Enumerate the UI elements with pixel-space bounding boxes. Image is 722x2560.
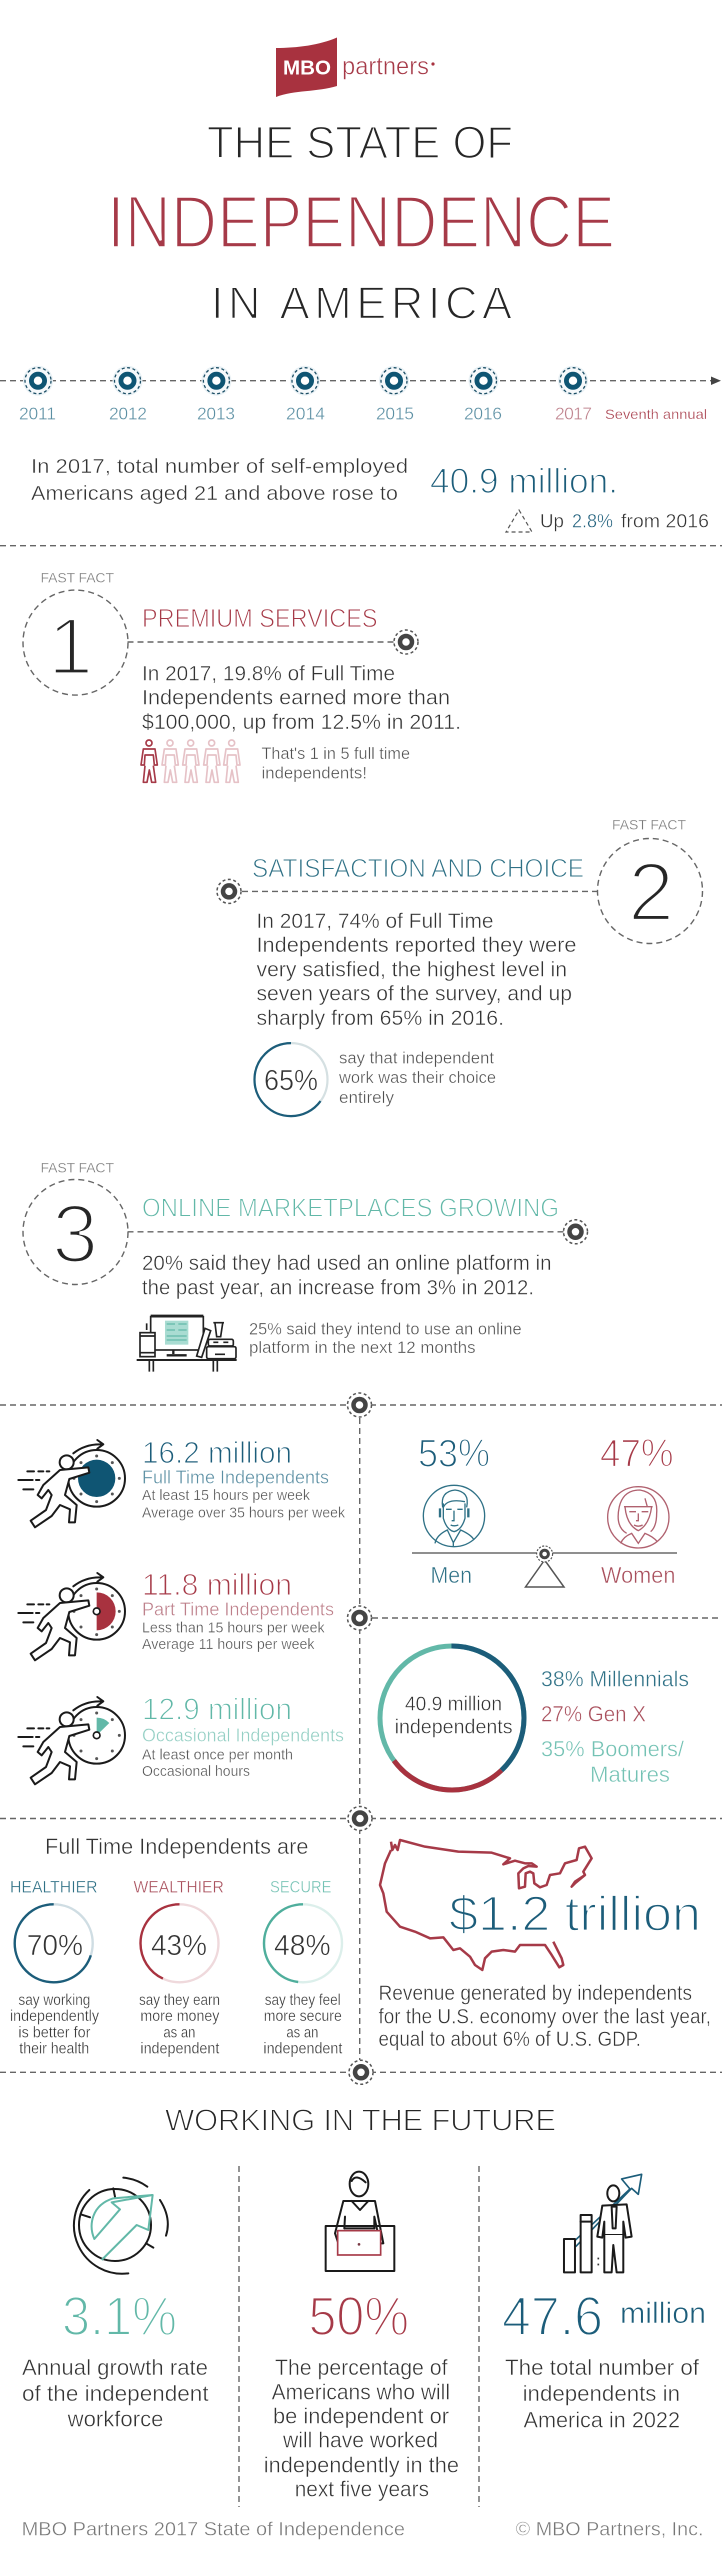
panel: fast fact 3 online marketplaces: 3 [52,1187,98,1280]
panel: fast fact 3 online marketplaces: 20% said they had used an online platform in [142,1252,552,1275]
panel: fast fact 2 satisfaction and choice: seven years of the survey, and up [256,983,572,1006]
icon: USA outline [380,1840,592,1970]
panel: fast fact 2 satisfaction and choice: In 2017, 74% of Full Time [256,910,494,933]
panel: part time independents: Part Time Independents [142,1600,334,1620]
text: secure caption: independent [263,2040,343,2057]
panel: fast fact 1 premium services: PREMIUM SERVICES [142,605,378,633]
panel: 47.6 million [502,2174,706,2432]
timeline 2011-2017: 2015 [376,404,414,424]
intro statement: Americans aged 21 and above rose to [31,482,398,505]
timeline 2011-2017: 2014 [286,404,325,424]
panel: fifty percent: be independent or [273,2403,449,2428]
panel: fast fact 2 satisfaction and choice: FAST FACT [612,817,686,833]
footer: © MBO Partners, Inc. [516,2519,704,2541]
panel: fast fact 3 online marketplaces: 25% said they intend to use an online [249,1320,522,1338]
panel: 47.6 million: America in 2022 [524,2407,680,2432]
chart: 48% ring: 48% [274,1930,331,1962]
panel: growth rate: workforce [67,2407,163,2432]
panel: generations donut: Matures [590,1762,670,1787]
text: secure caption: say they feel [265,1992,341,2009]
icon: runner with full clock [18,1440,125,1527]
icon: runner with wedge clock [18,1697,125,1784]
intro statement: 2.8% [572,510,613,532]
chart: 43% ring [140,1904,218,1982]
panel: 47.6 million: 47.6 [502,2285,603,2347]
panel: full time independents: Full Time Independents [142,1468,329,1488]
panel: fast fact 2 satisfaction and choice: SATISFACTION AND CHOICE [252,855,584,883]
panel: fast fact 1 premium services: In 2017, 19.8% of Full Time [142,663,395,686]
icon: person with bars and rising arrow [564,2174,642,2272]
text: secure caption [263,1992,343,2057]
title: INDEPENDENCE [107,180,615,264]
section dividers [0,1393,722,2084]
panel: men vs women balance: 47% [600,1432,674,1475]
text: health caption: say working [18,1992,90,2009]
panel: fast fact 2 satisfaction and choice: entirely [339,1089,395,1107]
panel: fast fact 1 premium services: Independents earned more than [142,687,450,710]
timeline 2011-2017 [0,366,721,424]
panel: fifty percent: Americans who will [272,2379,450,2404]
text: wealth caption [139,1992,220,2057]
panel: fast fact 3 online marketplaces: platform in the next 12 months [249,1339,476,1357]
timeline 2011-2017: Seventh annual [605,406,707,422]
panel: fifty percent: next five years [295,2477,429,2502]
panel: growth rate: 3.1% [62,2285,177,2347]
panel: fast fact 2 satisfaction and choice: Independents reported they were [256,934,576,957]
icon: woman portrait [608,1487,669,1548]
panel: fast fact 2 satisfaction and choice: work was their choice [338,1069,496,1087]
panel: part time independents [18,1567,334,1660]
intro statement: Up [540,510,564,532]
icon: target with arrow [74,2178,168,2274]
panel: fast fact 2 satisfaction and choice: 2 [628,846,674,939]
chart: donut [380,1646,524,1790]
panel: fast fact 3 online marketplaces: the past year, an increase from 3% in 2012. [142,1276,534,1299]
panel: fast fact 1 premium services: independents! [262,765,367,783]
panel: fast fact 2 satisfaction and choice: very satisfied, the highest level in [256,958,567,981]
panel: full time independents: Average over 35 hours per week [142,1506,346,1522]
panel: fifty percent: 50% [308,2285,409,2347]
panel: generations donut: 40.9 million [405,1693,502,1716]
text: health caption: is better for [18,2024,90,2041]
panel: men vs women balance: 53% [418,1432,490,1475]
timeline 2011-2017: 2011 [19,404,56,424]
panel: occasional independents: Occasional Independents [142,1726,344,1746]
text: wealth caption: independent [140,2040,220,2057]
text: health caption: their health [19,2040,89,2057]
panel: part time independents: Less than 15 hours per week [142,1620,325,1636]
panel: revenue map: $1.2 trillion [449,1888,701,1942]
title [107,117,615,329]
intro statement: In 2017, total number of self-employed [31,455,408,478]
panel: generations donut: 38% Millennials [541,1667,689,1692]
panel: generations donut: 27% Gen X [541,1702,646,1727]
footer [22,2519,704,2541]
panel: fifty percent [264,2172,459,2502]
panel: fifty percent: will have worked [282,2428,438,2453]
panel: fast fact 3 online marketplaces: ONLINE MARKETPLACES GROWING [142,1194,559,1222]
panel: generations donut: independents [395,1715,513,1738]
panel: fast fact 1 premium services: That's 1 in 5 full time [262,745,410,763]
panel: occasional independents: 12.9 million [142,1691,292,1726]
chart: 65% ring [254,1043,328,1116]
intro statement [31,455,709,532]
panel: revenue map [378,1840,711,2051]
panel: 47.6 million: independents in [523,2381,680,2406]
panel: fifty percent: The percentage of [275,2355,448,2380]
panel: full time independents [18,1435,346,1527]
intro statement: from 2016 [621,510,709,532]
panel: 47.6 million: The total number of [505,2355,700,2380]
panel: occasional independents: Occasional hours [142,1764,250,1780]
timeline 2011-2017: 2013 [197,404,235,424]
panel: growth rate: Annual growth rate [22,2355,208,2380]
timeline 2011-2017: 2016 [464,404,502,424]
panel: full time independents are [10,1834,343,2057]
chart: 70% ring: 70% [27,1930,83,1962]
panel: fast fact 1 premium services [23,570,461,783]
text: wealth caption: say they earn [139,1992,220,2009]
panel: full time independents are: Full Time Independents are [45,1834,308,1859]
panel: revenue map: Revenue generated by independents [378,1981,692,2005]
panel: full time independents are: WEALTHIER [134,1878,224,1897]
icon: man portrait [423,1485,485,1547]
panel: fast fact 2 satisfaction and choice: say that independent [339,1050,494,1068]
icon: person at laptop [326,2172,394,2271]
timeline 2011-2017: 2012 [109,404,147,424]
chart: 48% ring [264,1904,342,1982]
panel: fifty percent: independently in the [264,2452,459,2477]
panel: generations donut [380,1646,689,1790]
chart: 43% ring: 43% [151,1930,207,1962]
footer: MBO Partners 2017 State of Independence [22,2519,405,2541]
scale beam and fulcrum [412,1546,677,1587]
logo: MBO partners [276,38,435,97]
timeline 2011-2017: 2017 [555,404,592,424]
panel: part time independents: 11.8 million [142,1567,292,1602]
logo: MBO partners: MBO [283,57,331,79]
text: secure caption: as an [286,2024,318,2041]
panel: full time independents are: HEALTHIER [10,1878,98,1897]
panel: men vs women balance: Men [430,1562,472,1588]
panel: revenue map: equal to about 6% of U.S. GDP. [378,2027,641,2051]
panel: fast fact 3 online marketplaces [23,1160,588,1372]
text: wealth caption: as an [163,2024,195,2041]
panel: generations donut: 35% Boomers/ [541,1737,685,1762]
panel: part time independents: Average 11 hours per week [142,1637,315,1653]
panel: men vs women balance [412,1432,677,1588]
chart: 70% ring [15,1904,93,1982]
chart: 65% ring: 65% [264,1065,318,1097]
text: secure caption: more secure [264,2008,342,2025]
panel: growth rate: of the independent [22,2381,209,2406]
panel: 47.6 million: million [620,2297,706,2330]
icon: computer desk [137,1316,237,1372]
panel: growth rate [22,2178,209,2432]
panel: full time independents: At least 15 hours per week [142,1488,311,1504]
panel: fast fact 2 satisfaction and choice [217,817,702,1116]
text: wealth caption: more money [140,2008,220,2025]
text: health caption: independently [10,2008,99,2025]
panel: fast fact 1 premium services: 1 [48,602,93,692]
panel: men vs women balance: Women [601,1562,675,1588]
panel: full time independents are: SECURE [270,1878,332,1897]
panel: full time independents: 16.2 million [142,1435,292,1470]
panel: fast fact 1 premium services: FAST FACT [40,570,114,586]
icon: runner with half clock [18,1573,125,1660]
title: THE STATE OF [207,117,513,168]
icon: five people [141,740,240,782]
panel: occasional independents [18,1691,344,1784]
panel: fast fact 2 satisfaction and choice: sharply from 65% in 2016. [256,1007,504,1030]
intro statement: 40.9 million. [430,462,618,501]
title: IN AMERICA [211,278,512,329]
panel: occasional independents: At least once per month [142,1747,293,1763]
logo: MBO partners: partners [342,52,429,80]
panel: fast fact 1 premium services: $100,000, up from 12.5% in 2011. [142,711,461,734]
text: health caption [10,1992,99,2057]
heading: working in the future: WORKING IN THE FUTURE [165,2103,556,2138]
panel: fast fact 3 online marketplaces: FAST FACT [40,1160,114,1176]
